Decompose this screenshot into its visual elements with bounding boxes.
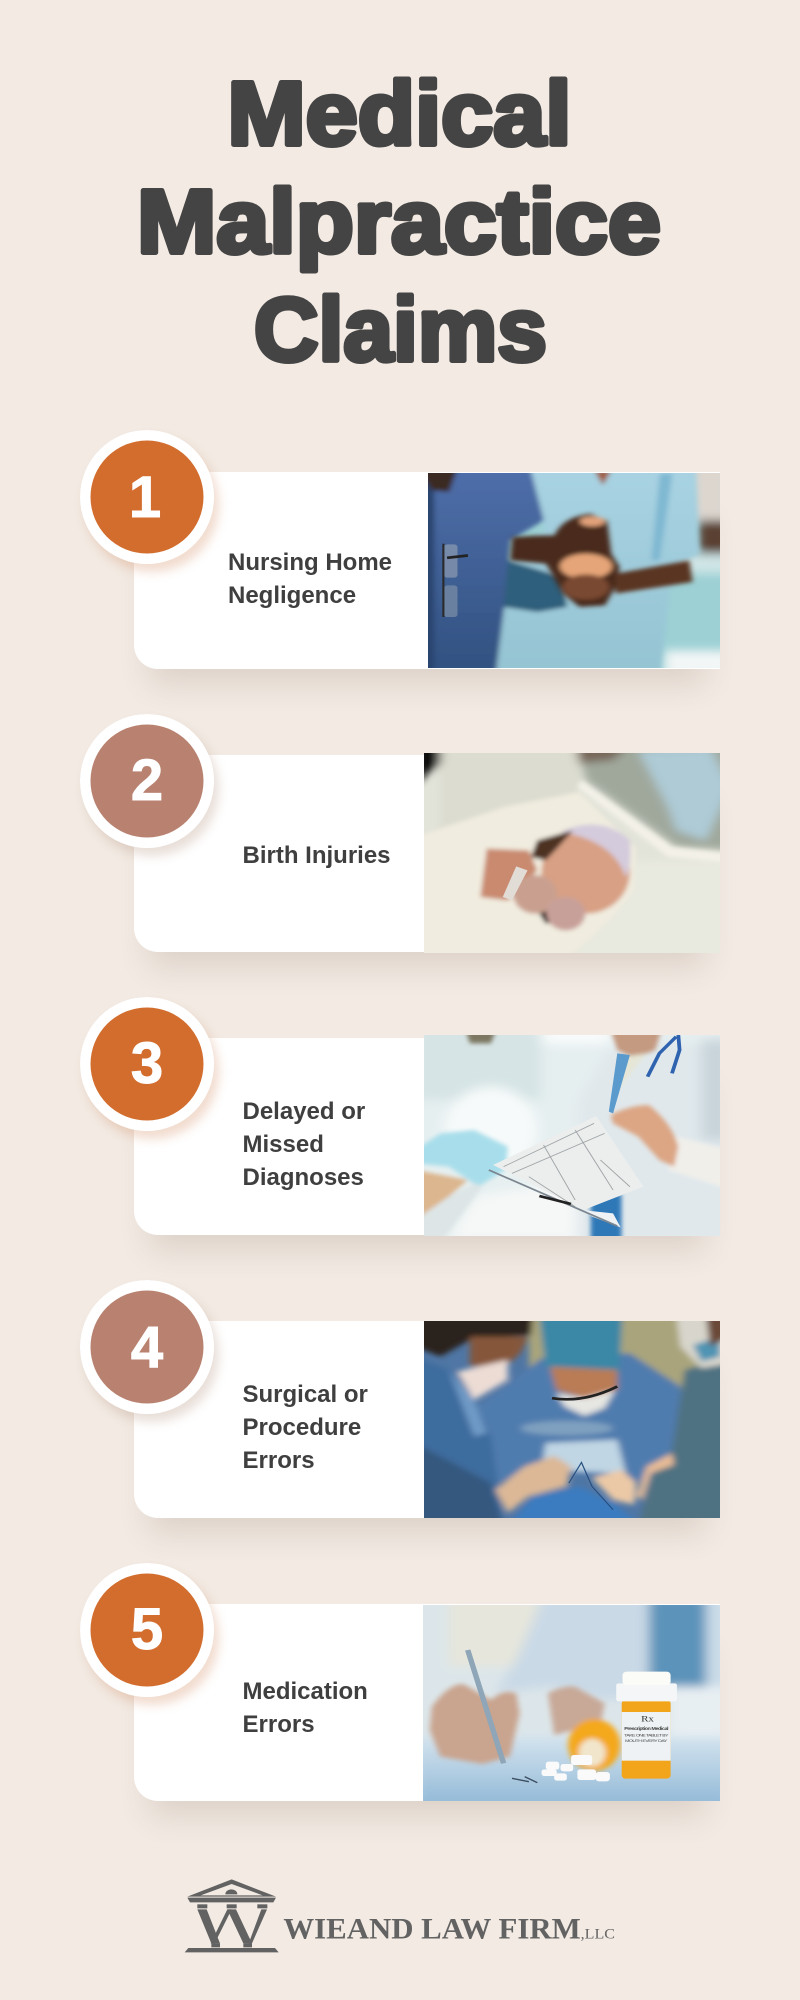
photo: swaddled newborn [424, 753, 720, 953]
panel: card 2 background [134, 755, 720, 952]
photo: prescription and pill bottles: MOUTH EVERY DAY [625, 1738, 667, 1743]
label: medication errors: Errors [242, 1711, 315, 1738]
title: Medical [228, 64, 572, 164]
badge: number 2: 2 [131, 748, 163, 813]
photo: nursing home caregiver holding hands [428, 473, 720, 668]
photo: surgeons operating [424, 1321, 720, 1518]
photo: doctor reading chart [424, 1035, 720, 1236]
photo: prescription and pill bottles [423, 1605, 720, 1801]
badge: number 5: 5 [131, 1597, 163, 1662]
label: surgical or procedure errors: Errors [242, 1446, 315, 1474]
title: Claims [254, 280, 547, 380]
wordmark: WIEAND LAW FIRM [283, 1912, 581, 1945]
badge: number 4: 4 [131, 1315, 163, 1380]
label: delayed or missed diagnoses: Delayed or [242, 1098, 365, 1125]
label: medication errors: Medication [242, 1678, 368, 1705]
label: birth injuries: Birth Injuries [242, 842, 391, 868]
badge: number 3: 3 [131, 1031, 163, 1096]
label: surgical or procedure errors: Procedure [242, 1414, 361, 1440]
panel: card 5 background [134, 1604, 720, 1801]
label: nursing home negligence: Negligence [228, 582, 356, 608]
label: surgical or procedure errors: Surgical or [242, 1380, 368, 1408]
panel: card 3 background [134, 1038, 720, 1235]
panel: card 1 background [134, 472, 720, 669]
badge: number 2 [80, 714, 214, 848]
badge: number 4 [80, 1280, 214, 1414]
badge: number 3 [80, 997, 214, 1131]
badge: number 5 [80, 1563, 214, 1697]
title [137, 64, 661, 380]
label: medication errors [242, 1678, 368, 1738]
photo: prescription and pill bottles: TAKE ONE TABLET BY [624, 1733, 669, 1738]
label: nursing home negligence [228, 548, 392, 608]
photo: prescription and pill bottles: Prescription Medical [624, 1726, 669, 1732]
label: delayed or missed diagnoses: Missed [242, 1131, 324, 1158]
title: Malpractice [137, 172, 661, 272]
photo: prescription and pill bottles: Rx [641, 1714, 654, 1724]
icon: courthouse with W columns [185, 1879, 279, 1952]
panel: card 4 background [134, 1321, 720, 1518]
label: delayed or missed diagnoses [242, 1098, 365, 1191]
wordmark suffix: ,LLC [581, 1926, 615, 1942]
label: delayed or missed diagnoses: Diagnoses [242, 1164, 364, 1191]
label: surgical or procedure errors [242, 1380, 368, 1474]
badge: number 1: 1 [129, 465, 161, 530]
label: nursing home negligence: Nursing Home [228, 548, 392, 576]
logo: Wieand Law Firm [184, 1879, 615, 1952]
badge: number 1 [80, 430, 214, 564]
